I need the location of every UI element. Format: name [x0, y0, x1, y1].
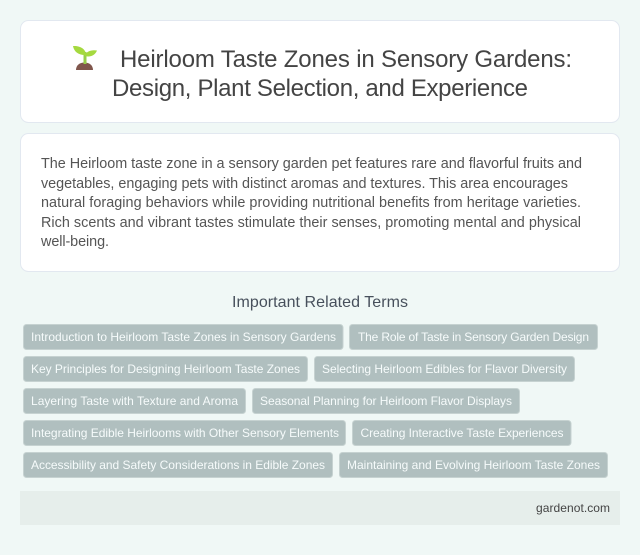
- description text: natural foraging behaviors while providing nutritional benefits from heritage varieties.: [41, 195, 581, 211]
- description text: well-being.: [40, 234, 109, 250]
- title: Design, Plant Selection, and Experience: [112, 75, 528, 102]
- title: [112, 46, 572, 102]
- related terms tags: Introduction to Heirloom Taste Zones in Sensory Gardens: [31, 330, 336, 344]
- icon: seedling: [73, 46, 97, 70]
- related terms tags: Creating Interactive Taste Experiences: [360, 426, 564, 440]
- related terms tags: Integrating Edible Heirlooms with Other Sensory Elements: [31, 426, 339, 440]
- footer: [20, 491, 620, 525]
- related terms tags: The Role of Taste in Sensory Garden Design: [358, 330, 589, 344]
- title: Heirloom Taste Zones in Sensory Gardens:: [120, 46, 572, 73]
- description text: vegetables, engaging pets with distinct aromas and textures. This area encourages: [41, 176, 568, 192]
- related terms tags: Maintaining and Evolving Heirloom Taste Zones: [347, 458, 600, 472]
- footer: gardenot.com: [536, 501, 610, 515]
- related terms tags: Selecting Heirloom Edibles for Flavor Diversity: [322, 362, 567, 376]
- related terms tags: Seasonal Planning for Heirloom Flavor Displays: [260, 394, 512, 408]
- related terms tags: Key Principles for Designing Heirloom Taste Zones: [31, 362, 300, 376]
- related terms tags: [24, 324, 608, 478]
- description text: The Heirloom taste zone in a sensory garden pet features rare and flavorful fruits and: [41, 156, 582, 172]
- description text: [40, 156, 582, 250]
- heading: related terms: Important Related Terms: [232, 294, 408, 311]
- related terms tags: Accessibility and Safety Considerations in Edible Zones: [31, 458, 325, 472]
- panel: description: [20, 134, 620, 272]
- panel: title card: [20, 20, 620, 122]
- description text: Rich scents and vibrant tastes stimulate their senses, promoting mental and physical: [41, 215, 581, 231]
- related terms tags: Layering Taste with Texture and Aroma: [31, 394, 238, 408]
